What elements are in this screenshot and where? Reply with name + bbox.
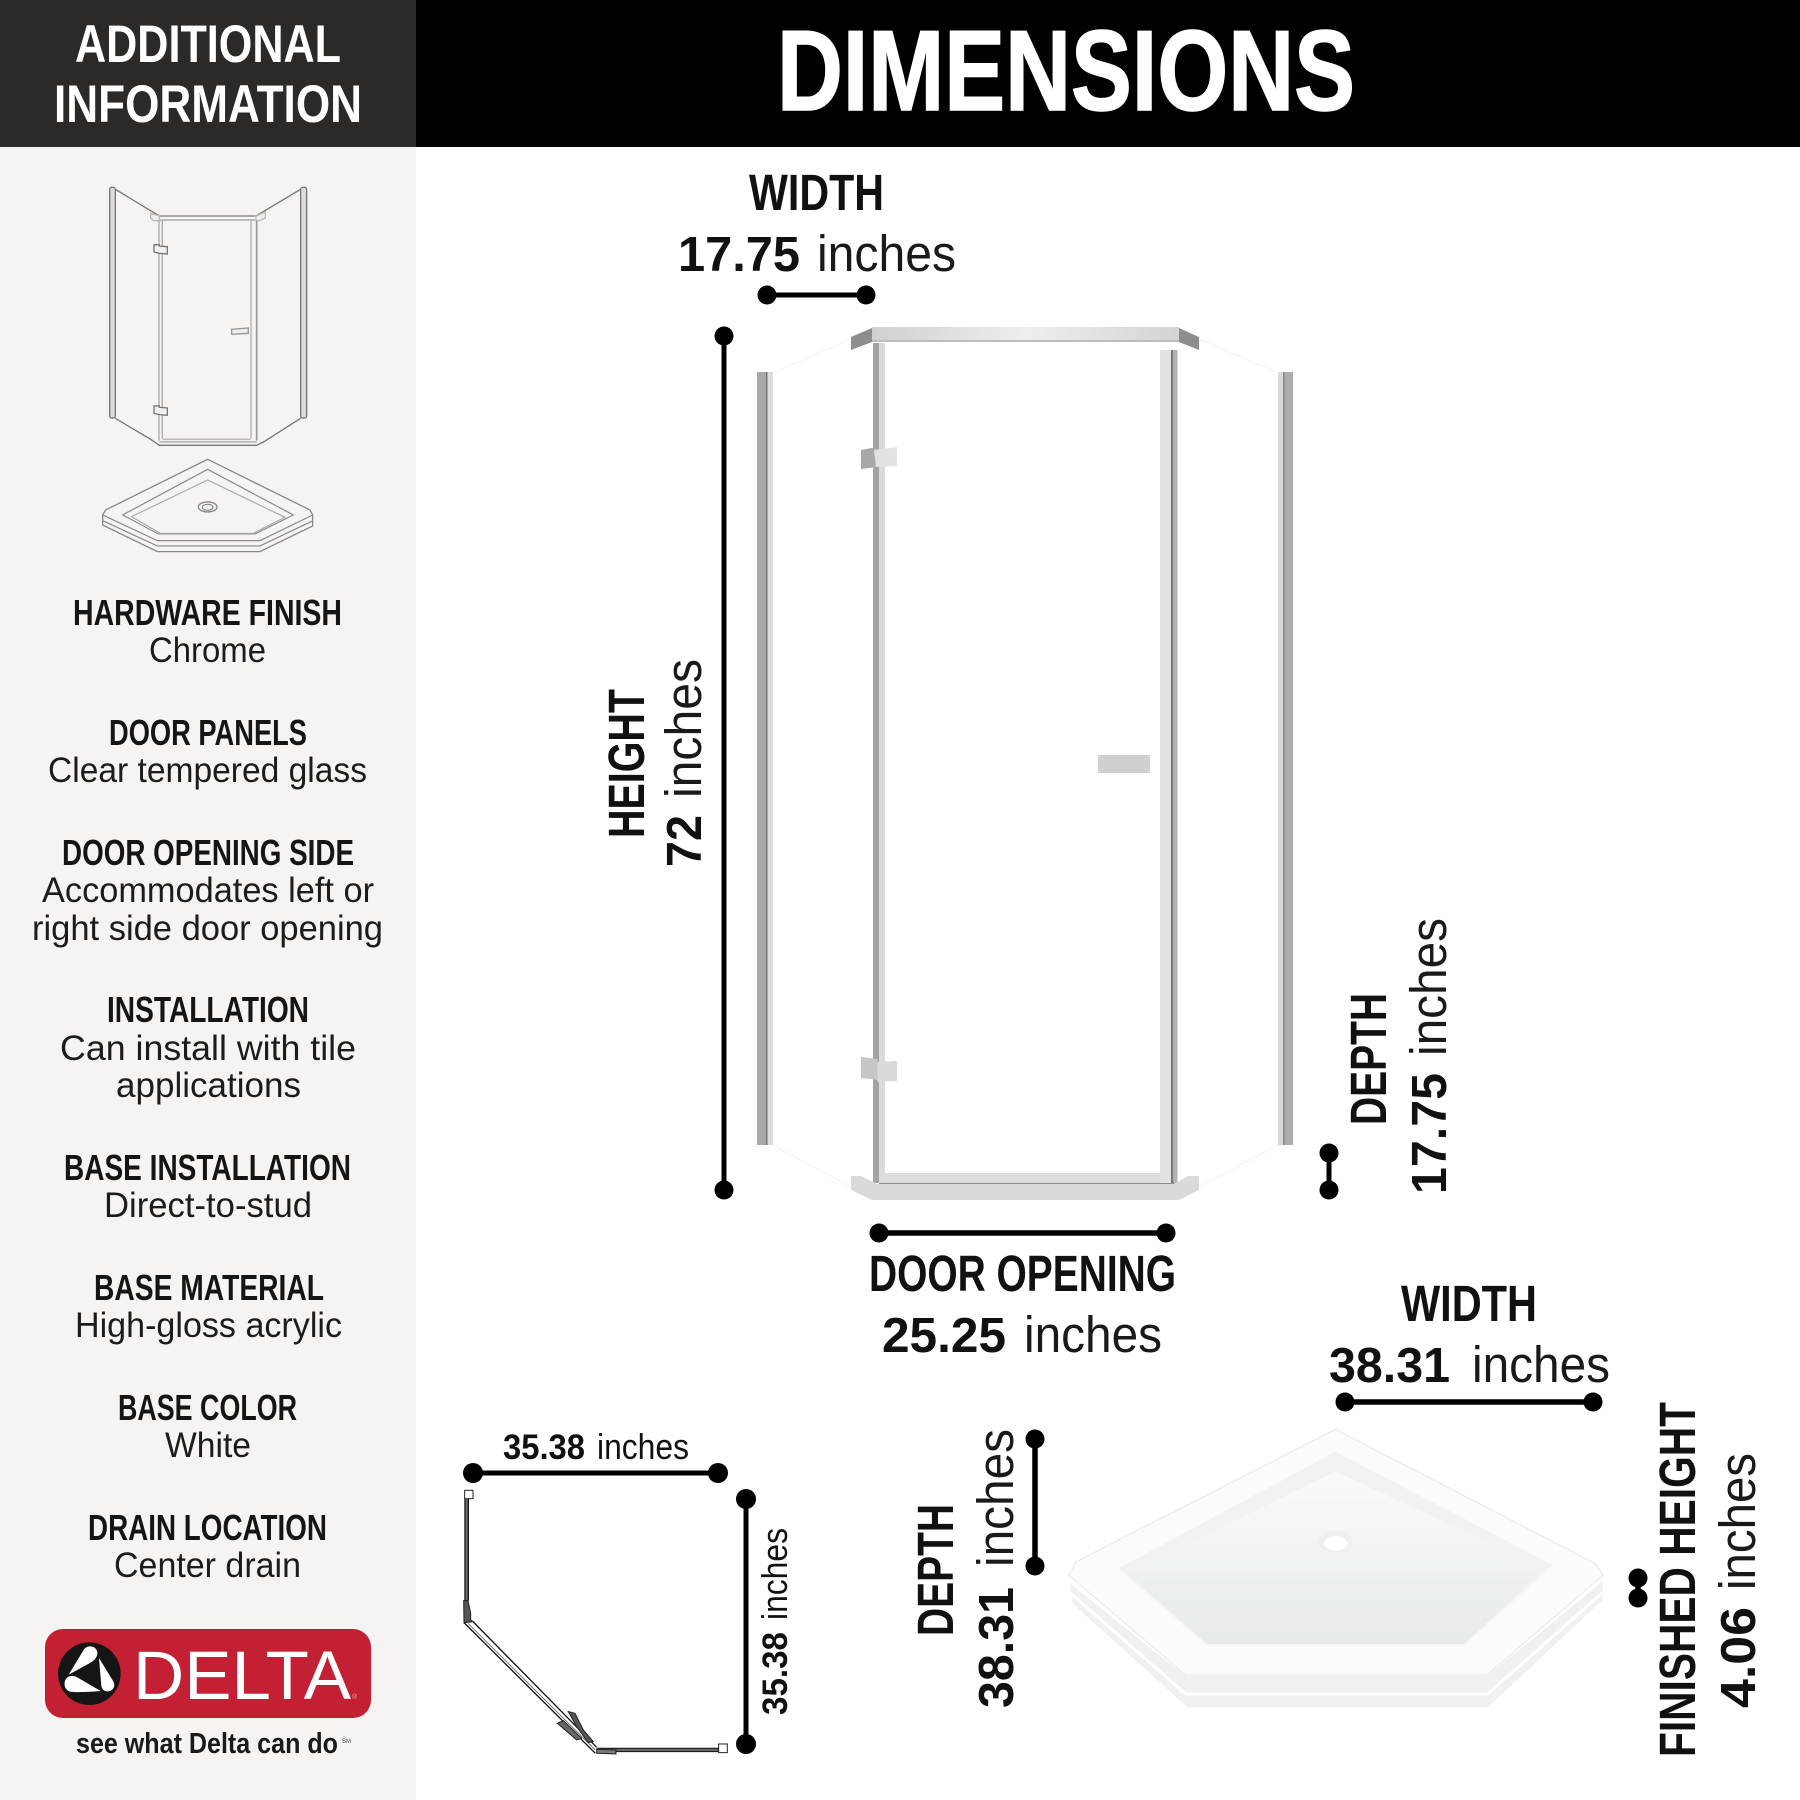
spec: door opening side: DOOR OPENING SIDE xyxy=(62,832,354,873)
spec: base color xyxy=(118,1387,297,1465)
dimension: door opening 25.25: 25.25 xyxy=(882,1309,1006,1363)
dimension: plan width 35.38: inches xyxy=(597,1426,689,1467)
icon: Delta triangle mark xyxy=(58,1642,121,1705)
dimension: base width 38.31: inches xyxy=(1472,1336,1610,1393)
logo: Delta: see what Delta can do xyxy=(76,1728,338,1760)
illustration: shower base xyxy=(1069,1429,1603,1707)
dimension: height 72: HEIGHT xyxy=(598,689,655,838)
bottom hinge xyxy=(861,1057,897,1082)
spec: base material: High-gloss acrylic xyxy=(75,1306,342,1345)
dimension: shower width 17.75: WIDTH xyxy=(749,164,884,221)
spec: drain location: DRAIN LOCATION xyxy=(88,1507,327,1548)
dimension: height 72: inches xyxy=(655,659,712,798)
spec: installation xyxy=(60,989,356,1105)
title: dimensions xyxy=(416,0,1800,147)
dimension: shower depth 17.75: 17.75 xyxy=(1403,1073,1457,1194)
spec: hardware finish: HARDWARE FINISH xyxy=(73,592,342,633)
dimension: finished height 4.06: inches xyxy=(1709,1453,1766,1590)
dimension: plan depth 35.38: 35.38 xyxy=(756,1632,795,1715)
spec: base color: White xyxy=(165,1426,251,1465)
spec: installation: applications xyxy=(116,1066,301,1105)
dimension: base depth 38.31: inches xyxy=(967,1429,1024,1567)
spec: door panels: DOOR PANELS xyxy=(109,712,307,753)
dimension: height 72: 72 xyxy=(658,815,712,867)
dimension: base depth 38.31: 38.31 xyxy=(970,1587,1024,1708)
spec: base material: BASE MATERIAL xyxy=(94,1267,324,1308)
door handle xyxy=(1098,755,1150,773)
sidebar heading: ADDITIONAL xyxy=(75,15,341,74)
dimension: base width 38.31: WIDTH xyxy=(1401,1275,1537,1332)
icon: shower base line drawing xyxy=(103,459,313,552)
dimension: plan depth 35.38: inches xyxy=(754,1528,795,1620)
panel: additional information sidebar xyxy=(0,0,416,1800)
right wall rail xyxy=(1278,372,1293,1145)
logo: Delta xyxy=(45,1629,371,1760)
dimension: shower depth 17.75: inches xyxy=(1400,918,1457,1056)
spec: base installation xyxy=(64,1147,351,1225)
spec: drain location: Center drain xyxy=(114,1546,301,1585)
top hinge xyxy=(861,447,897,469)
spec: hardware finish xyxy=(73,592,342,670)
spec: installation: Can install with tile xyxy=(60,1029,356,1068)
logo: Delta: ® xyxy=(352,1693,358,1701)
dimension: shower width 17.75: 17.75 xyxy=(678,228,800,282)
spec: door panels xyxy=(48,712,367,790)
dimension: door opening 25.25: inches xyxy=(1024,1306,1162,1363)
spec: base color: BASE COLOR xyxy=(118,1387,297,1428)
dimension: finished height 4.06: FINISHED HEIGHT xyxy=(1649,1402,1706,1757)
dimension: finished height 4.06: 4.06 xyxy=(1712,1607,1766,1708)
spec: door opening side: Accommodates left or xyxy=(42,871,374,910)
top header bar xyxy=(851,327,1199,350)
dimension: shower depth 17.75: DEPTH xyxy=(1340,993,1397,1125)
dimension: shower depth 17.75 xyxy=(1320,918,1457,1200)
illustration: shower enclosure photo xyxy=(757,327,1293,1200)
dimension: base width 38.31: 38.31 xyxy=(1329,1339,1450,1393)
dimension: shower width 17.75: inches xyxy=(817,225,956,282)
logo: Delta: SM xyxy=(342,1739,351,1745)
spec: door opening side: right side door opening xyxy=(32,909,383,948)
dimension: shower width 17.75 xyxy=(678,164,956,304)
dimension: plan width 35.38: 35.38 xyxy=(503,1428,585,1467)
sidebar heading xyxy=(0,0,416,147)
dimension: plan width 35.38 xyxy=(463,1426,728,1483)
diagram: top-down plan view xyxy=(464,1490,727,1754)
right door post xyxy=(1160,350,1178,1186)
dimension: door opening 25.25: DOOR OPENING xyxy=(869,1245,1176,1302)
title: dimensions: DIMENSIONS xyxy=(777,8,1355,135)
spec: base material xyxy=(75,1267,342,1345)
sidebar heading: INFORMATION xyxy=(54,75,362,134)
spec: installation: INSTALLATION xyxy=(107,989,309,1030)
spec: door opening side xyxy=(32,832,383,948)
dimension: base depth 38.31: DEPTH xyxy=(907,1504,964,1636)
left wall rail xyxy=(757,372,773,1145)
left door post xyxy=(873,343,885,1183)
dimension: plan depth 35.38 xyxy=(736,1489,795,1754)
spec: hardware finish: Chrome xyxy=(149,631,266,670)
dimension: finished height 4.06 xyxy=(1628,1402,1766,1757)
spec: drain location xyxy=(88,1507,327,1585)
spec: base installation: BASE INSTALLATION xyxy=(64,1147,351,1188)
bottom threshold xyxy=(851,1173,1199,1200)
dimension: base depth 38.31 xyxy=(907,1429,1044,1708)
dimension: base width 38.31 xyxy=(1329,1275,1610,1412)
icon: shower door line drawing xyxy=(110,187,307,445)
spec: door panels: Clear tempered glass xyxy=(48,751,367,790)
logo: Delta: DELTA xyxy=(133,1637,351,1714)
spec: base installation: Direct-to-stud xyxy=(104,1186,312,1225)
dimension: door opening 25.25 xyxy=(869,1224,1176,1363)
dimension: height 72 xyxy=(598,326,734,1200)
